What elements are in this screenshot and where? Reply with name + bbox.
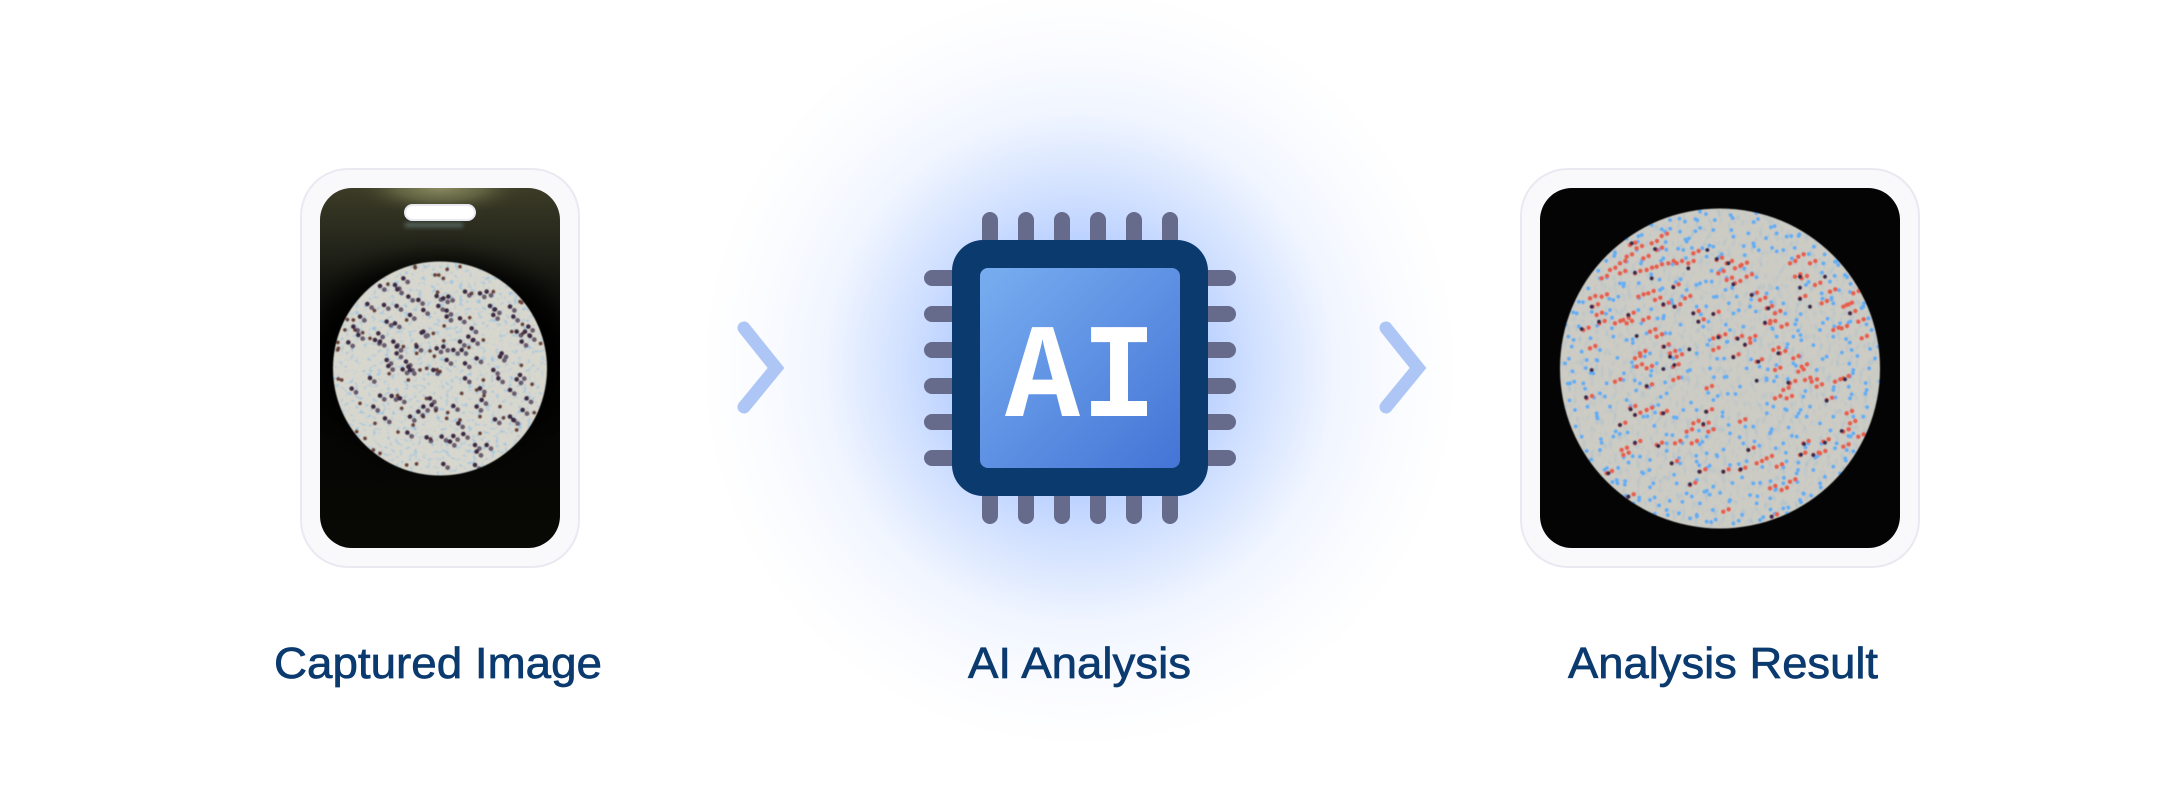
- phone tissue sample: [332, 260, 548, 476]
- caption: AI Analysis: AI Analysis: [968, 639, 1191, 688]
- caption: Analysis Result: Analysis Result: [1568, 639, 1878, 688]
- phone notch pill: [405, 205, 475, 220]
- result tissue with detected cells: [1559, 208, 1881, 530]
- arrow: captured image to AI analysis: [744, 328, 776, 407]
- blue negative cell markers: [1562, 209, 1880, 526]
- chip AI lettering: A: [1005, 304, 1081, 457]
- chip AI lettering: I: [1082, 304, 1156, 457]
- chip AI lettering: [1005, 304, 1156, 457]
- panel: analysis result: [1520, 168, 1920, 568]
- result frame: [1521, 169, 1919, 567]
- panel: captured image phone: [301, 169, 579, 567]
- chip body: [952, 240, 1208, 496]
- caption: Captured Image: Captured Image: [274, 639, 602, 688]
- red positive cell markers: [1583, 234, 1867, 517]
- chip face: [980, 268, 1180, 468]
- phone frame: [301, 169, 579, 567]
- dark strong positive cell markers: [1582, 243, 1850, 517]
- result photo background: [1540, 188, 1900, 548]
- icon: AI chip: [932, 220, 1228, 516]
- phone camera photo: [320, 188, 560, 548]
- chip pins: [932, 220, 1228, 516]
- blue glow behind AI chip: [700, 0, 1460, 748]
- arrow: AI analysis to result: [1386, 328, 1418, 407]
